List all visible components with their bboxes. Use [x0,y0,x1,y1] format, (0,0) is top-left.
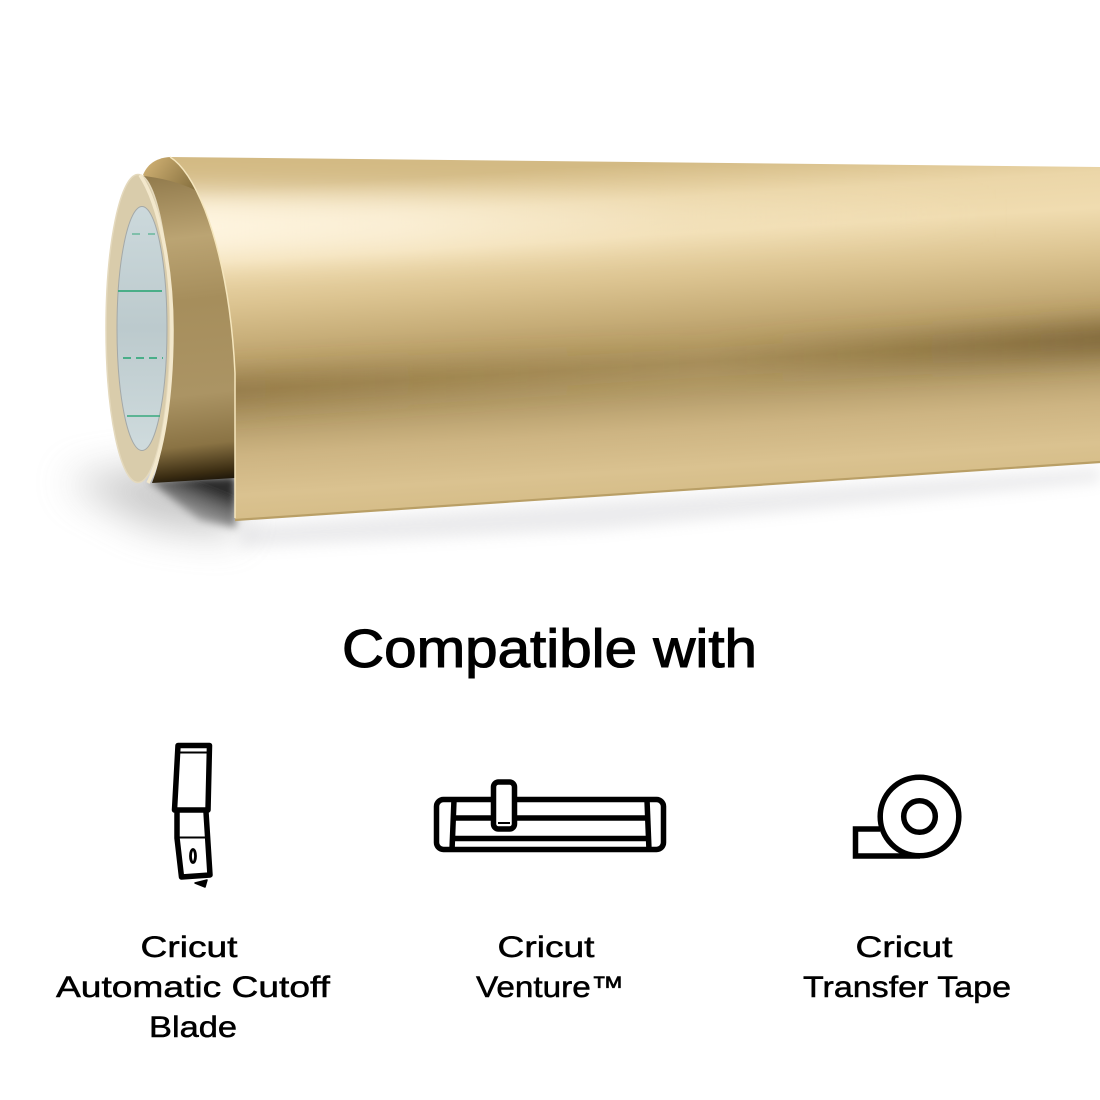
label: Cricut Transfer Tape: Cricut [856,931,953,964]
heading: Compatible with [342,619,757,679]
label: Cricut Venture: Venture™ [476,971,624,1004]
sheet left edge highlight [170,157,235,518]
label: Cricut Automatic Cutoff Blade [56,931,331,1044]
icon: cutoff blade [174,746,210,887]
label: Cricut Transfer Tape: Transfer Tape [803,971,1011,1004]
dark underside of the sheet [143,176,235,483]
icon: transfer tape [856,777,959,856]
main gold sheet [170,157,1100,520]
label: Cricut Automatic Cutoff Blade: Cricut [140,931,238,964]
sheet bottom edge [235,462,1100,520]
floor shadow [65,468,1100,548]
roll end: paper core edge [106,174,170,482]
wound vinyl rim [140,175,172,483]
label: Cricut Transfer Tape [803,931,1011,1004]
icon: Cricut Venture machine [436,782,664,850]
label: Cricut Venture [476,931,624,1004]
green guide lines [118,234,163,416]
back flap of the sheet [143,157,205,210]
sheet highlights and shading [150,192,1100,408]
label: Cricut Venture: Cricut [498,931,595,964]
label: Cricut Automatic Cutoff Blade: Blade [149,1011,237,1044]
photo: roll of gold vinyl [65,157,1100,548]
label: Cricut Automatic Cutoff Blade: Automatic Cutoff [56,971,331,1004]
roll core opening [117,206,167,450]
